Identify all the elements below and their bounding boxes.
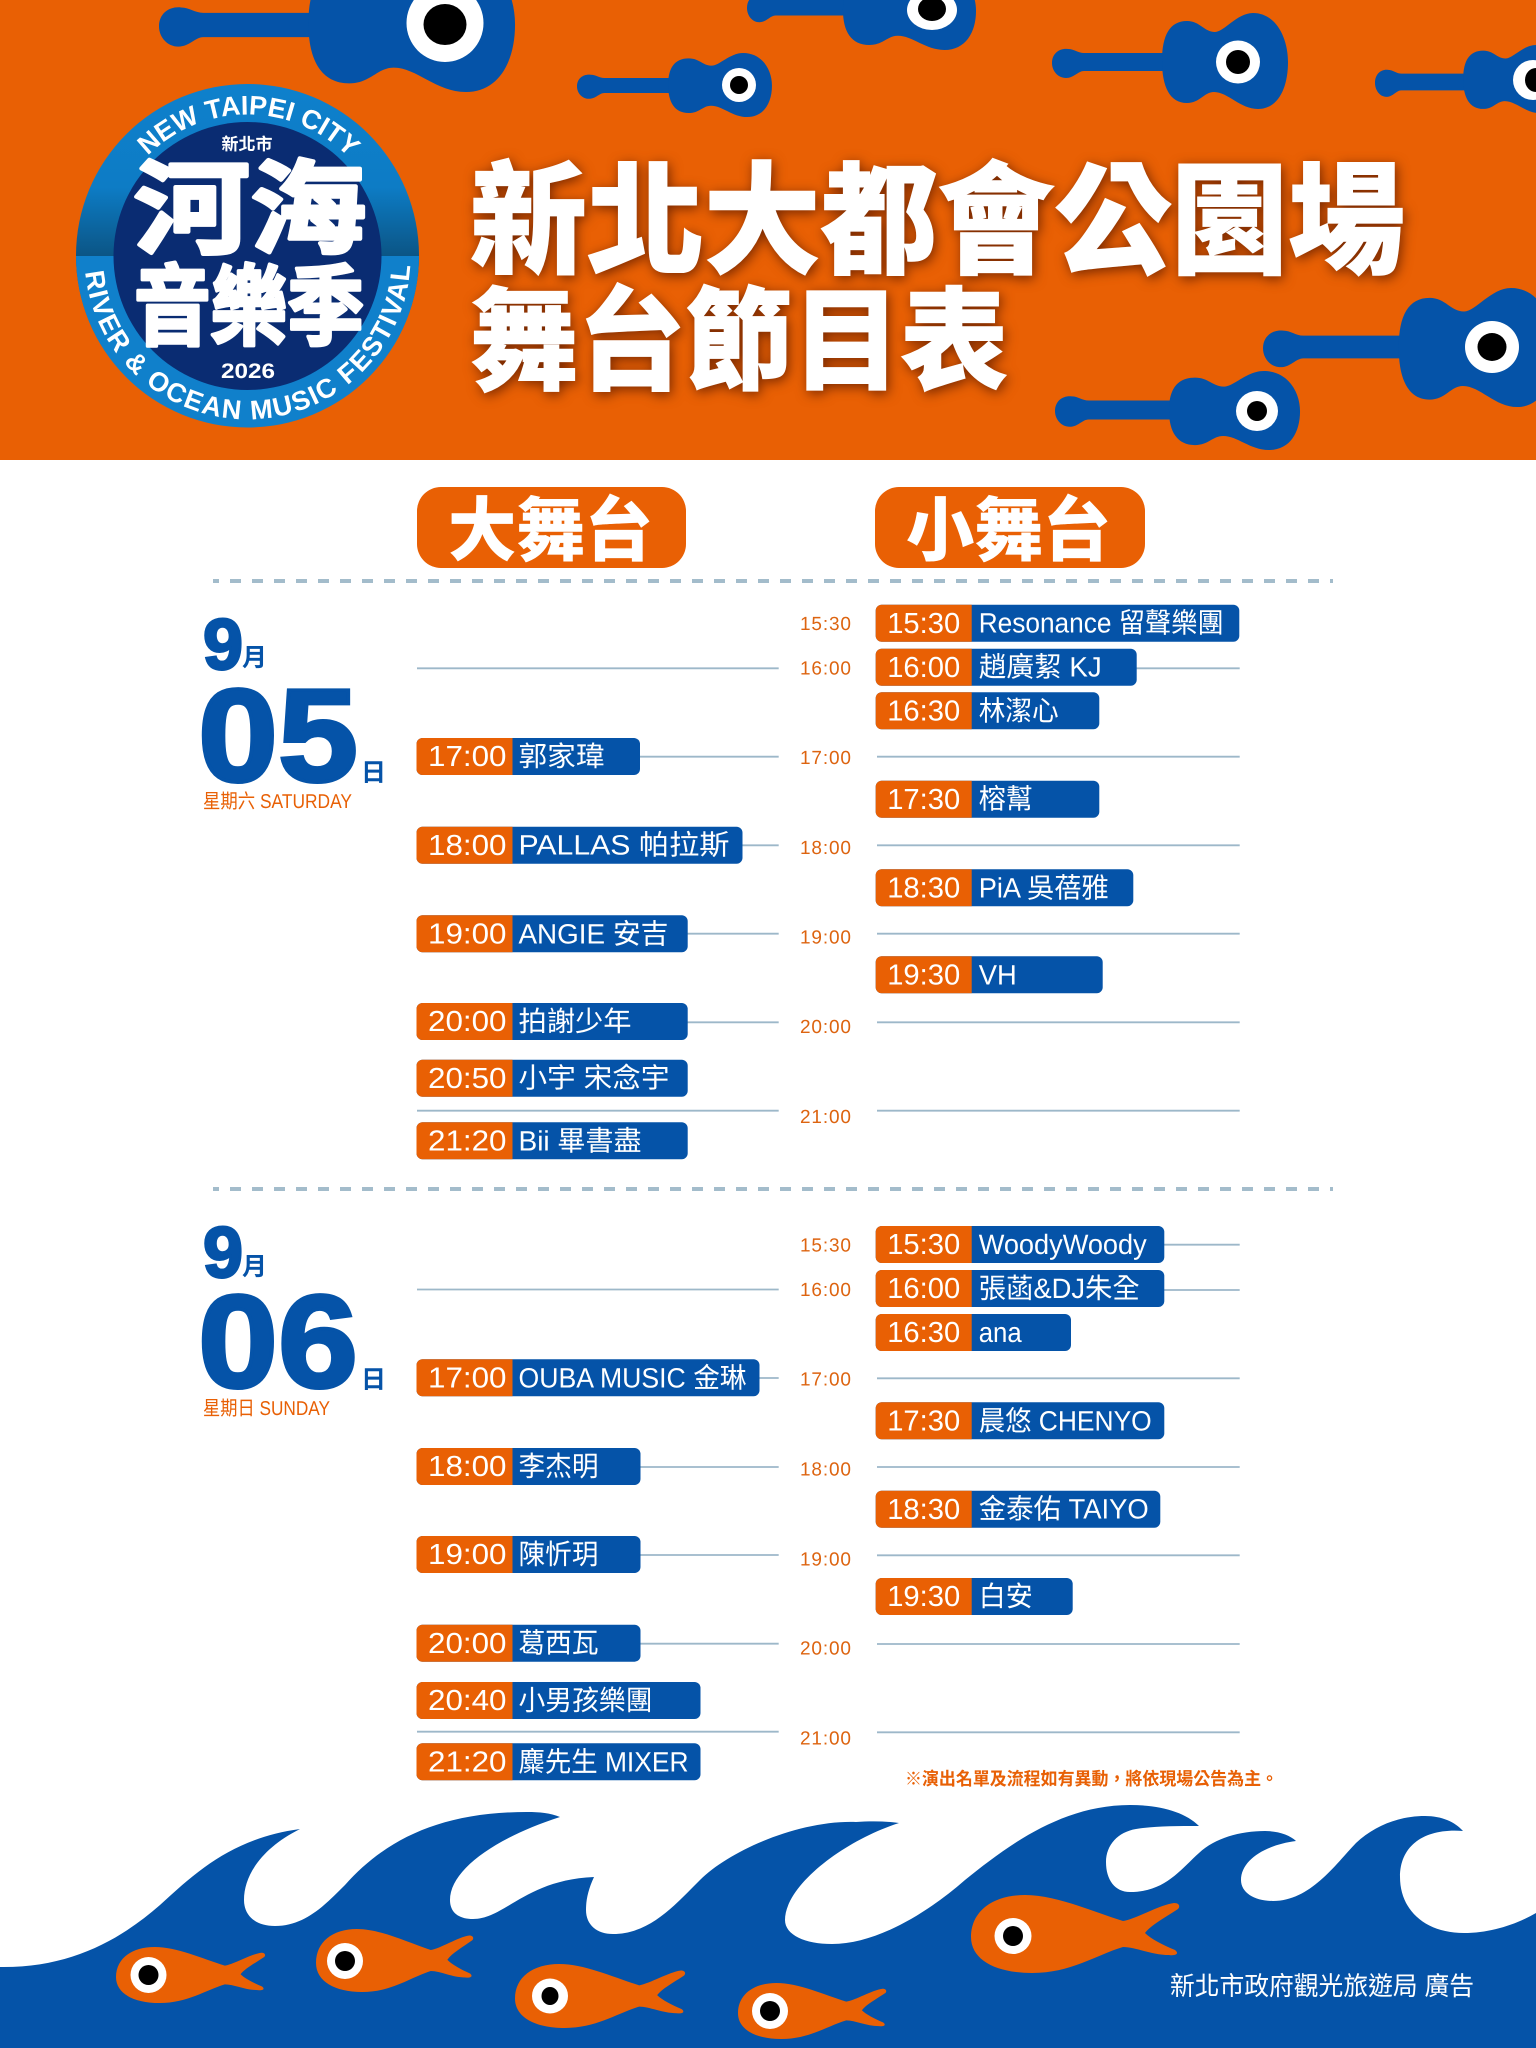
time labels day 2: 21:00: [800, 1728, 851, 1750]
time labels day 1: 18:00: [800, 838, 851, 859]
icon: fish 1: [116, 1947, 265, 2003]
time labels day 1: 20:00: [800, 1017, 851, 1038]
act: 16:00 張菡&DJ朱全: [876, 1270, 1164, 1307]
act: 20:40 小男孩樂團: [416, 1682, 700, 1719]
act: 20:00 拍謝少年: [416, 1003, 688, 1040]
main stage day 2 schedule: [416, 1359, 760, 1780]
date block: September 6: 9: [203, 1213, 243, 1293]
notice text: ※演出名單及流程如有異動，將依現場公告為主。: [905, 1769, 1278, 1789]
icon: guitar 6: [1263, 288, 1536, 407]
date block: September 5: [198, 605, 386, 813]
act: 17:00 郭家瑋: 17:00: [428, 741, 506, 773]
time labels day 1: 15:30: [800, 614, 851, 635]
time labels day 2: 15:30: [800, 1236, 851, 1256]
time labels day 2: 20:00: [800, 1639, 851, 1660]
act: 16:00 趙廣絜 KJ: 趙廣絜 KJ: [979, 652, 1102, 683]
act: 17:00 OUBA MUSIC 金琳: [416, 1359, 760, 1396]
act: 17:00 OUBA MUSIC 金琳: 17:00: [428, 1363, 506, 1395]
act: 19:30 VH: VH: [979, 959, 1017, 990]
act: 19:30 VH: 19:30: [887, 959, 960, 991]
icon: guitar 5: [1375, 45, 1536, 113]
act: 21:20 Bii 畢書盡: [416, 1122, 688, 1159]
act: 16:30 林潔心: 16:30: [887, 695, 960, 727]
icon: fish 3: [515, 1964, 685, 2028]
logo arc text top: NEW TAIPEI CITY: [136, 96, 362, 154]
act: 18:00 PALLAS: 18:00: [428, 830, 506, 862]
act: 20:50 小宇 宋念宇: 小宇 宋念宇: [518, 1063, 670, 1094]
logo big text 河海: 河海: [134, 128, 366, 275]
small stage day 2 schedule: [876, 1226, 1164, 1615]
act: 19:30 白安: 白安: [979, 1581, 1033, 1612]
act: 21:20 Bii 畢書盡: Bii 畢書盡: [518, 1125, 642, 1156]
act: 21:20 麋先生 MIXER: 21:20: [428, 1747, 506, 1779]
title: 舞台節目表: [470, 252, 1008, 414]
ocean waves: [0, 1805, 1536, 2048]
act: 20:40 小男孩樂團: 20:40: [428, 1685, 506, 1717]
date block: September 6: 星期日 SUNDAY: [203, 1398, 330, 1420]
act: 15:30 WoodyWoody: [876, 1226, 1164, 1263]
act: 18:00 李杰明: 18:00: [428, 1451, 506, 1483]
time labels day 1: 17:00: [800, 748, 851, 769]
date block: September 5: 05: [198, 662, 358, 809]
act: 15:30 WoodyWoody: WoodyWoody: [979, 1229, 1147, 1260]
icon: fish 2: [316, 1929, 473, 1992]
act: 19:00 ANGIE: 19:00: [428, 918, 506, 950]
act: 20:50 小宇 宋念宇: [416, 1060, 688, 1097]
act: 16:00 趙廣絜 KJ: [876, 649, 1137, 686]
act: 19:30 白安: 19:30: [887, 1581, 960, 1613]
icon: guitar 1: [159, 0, 515, 92]
act: 20:00 拍謝少年: 拍謝少年: [518, 1006, 632, 1037]
act: 21:20 Bii 畢書盡: 21:20: [428, 1126, 506, 1158]
date block: September 6: 日: [361, 1366, 386, 1394]
act: 16:30 林潔心: 林潔心: [979, 695, 1059, 726]
act: 16:30 ana: 16:30: [887, 1317, 960, 1349]
act: 16:00 張菡&DJ朱全: 張菡&DJ朱全: [979, 1273, 1140, 1304]
date block: September 5: 星期六 SATURDAY: [203, 791, 352, 813]
act: 16:00 趙廣絜 KJ: 16:00: [887, 652, 960, 684]
festival logo badge: [76, 84, 419, 428]
act: 16:00 張菡&DJ朱全: 16:00: [887, 1273, 960, 1305]
act: 17:30 晨悠 CHENYO: 17:30: [887, 1406, 960, 1438]
logo year: 2026: [221, 360, 275, 383]
time labels day 2: 19:00: [800, 1550, 851, 1570]
act: 19:00 陳忻玥: 19:00: [428, 1539, 506, 1571]
act: 15:30 Resonance 留聲樂團: [876, 605, 1239, 642]
act: 21:20 麋先生 MIXER: 麋先生 MIXER: [518, 1746, 688, 1777]
act: 17:00 OUBA MUSIC 金琳: OUBA MUSIC 金琳: [518, 1362, 746, 1393]
act: 18:00 PALLAS: [416, 827, 742, 864]
act: 19:30 VH: [876, 956, 1103, 993]
title: [470, 123, 1405, 414]
act: 18:30 金泰佑 TAIYO: 18:30: [887, 1494, 960, 1526]
act: 17:30 榕幫: [876, 781, 1099, 818]
act: 15:30 WoodyWoody: 15:30: [887, 1229, 960, 1261]
time labels day 1: 19:00: [800, 928, 851, 948]
logo big text 音樂季: 音樂季: [134, 237, 364, 364]
act: 17:00 郭家瑋: [416, 738, 640, 775]
icon: fish 4: [738, 1983, 886, 2039]
title: 新北大都會公園場: [470, 123, 1405, 300]
act: 20:00 葛西瓦: 20:00: [428, 1628, 506, 1660]
act: 16:30 ana: [876, 1314, 1071, 1351]
date block: September 5: 9: [203, 605, 243, 685]
time labels day 2: 18:00: [800, 1460, 851, 1481]
time labels day 1: 21:00: [800, 1107, 851, 1128]
act: 20:40 小男孩樂團: 小男孩樂團: [518, 1685, 652, 1716]
time labels day 1: 16:00: [800, 658, 851, 680]
time labels day 2: 16:00: [800, 1280, 851, 1301]
icon: guitar 3: [747, 0, 976, 50]
act: 17:30 晨悠 CHENYO: 晨悠 CHENYO: [979, 1405, 1152, 1436]
act: 18:30 PiA 吳蓓雅: [876, 869, 1133, 906]
act: 20:00 拍謝少年: 20:00: [428, 1006, 506, 1038]
icon: fish 5: [971, 1895, 1179, 1973]
header banner: [0, 0, 1536, 460]
hour grid lines day 1: [417, 668, 1240, 1111]
act: 19:00 ANGIE: ANGIE 安吉: [518, 918, 668, 949]
time labels day 2: [800, 1236, 851, 1750]
icon: guitar 4: [1052, 13, 1288, 109]
act: 20:00 葛西瓦: [416, 1625, 640, 1662]
logo small text 新北市: 新北市: [222, 135, 272, 154]
date block: September 6: 月: [242, 1253, 267, 1281]
act: 17:00 郭家瑋: 郭家瑋: [518, 741, 604, 772]
act: 19:00 ANGIE: [416, 915, 688, 952]
date block: September 5: 日: [361, 759, 386, 787]
act: 21:20 麋先生 MIXER: [416, 1743, 700, 1780]
act: 20:50 小宇 宋念宇: 20:50: [428, 1063, 506, 1095]
small stage day 1 schedule: [876, 605, 1239, 993]
act: 17:30 晨悠 CHENYO: [876, 1402, 1164, 1439]
date block: September 6: 06: [198, 1268, 358, 1415]
stage heading: small stage: 小舞台: [906, 475, 1111, 576]
act: 19:30 白安: [876, 1578, 1073, 1615]
act: 18:30 金泰佑 TAIYO: [876, 1491, 1160, 1528]
act: 16:30 ana: ana: [979, 1317, 1022, 1348]
time labels day 1: [800, 614, 851, 1128]
act: 18:30 金泰佑 TAIYO: 金泰佑 TAIYO: [979, 1494, 1149, 1525]
icon: guitar 7: [1055, 371, 1300, 450]
act: 18:00 李杰明: 李杰明: [518, 1451, 598, 1482]
date block: September 5: 月: [242, 644, 267, 672]
date block: September 6: [198, 1213, 386, 1420]
act: 17:30 榕幫: 榕幫: [979, 784, 1033, 815]
act: 18:30 PiA 吳蓓雅: 18:30: [887, 872, 960, 904]
time labels day 2: 17:00: [800, 1370, 851, 1391]
stage heading: main stage: 大舞台: [448, 475, 653, 576]
footer sponsor text: 新北市政府觀光旅遊局 廣告: [1170, 1971, 1474, 2001]
act: 18:00 李杰明: [416, 1448, 640, 1485]
act: 18:00 PALLAS: PALLAS 帕拉斯: [518, 830, 730, 861]
logo arc text bottom: RIVER & OCEAN MUSIC FESTIVAL: [85, 266, 410, 420]
icon: guitar 2: [577, 53, 772, 117]
act: 17:30 榕幫: 17:30: [887, 784, 960, 816]
act: 15:30 Resonance 留聲樂團: Resonance 留聲樂團: [979, 608, 1224, 639]
hour grid lines day 2: [417, 1245, 1240, 1732]
act: 19:00 陳忻玥: [416, 1536, 640, 1573]
act: 19:00 陳忻玥: 陳忻玥: [518, 1539, 598, 1570]
main stage day 1 schedule: [416, 738, 742, 1159]
act: 20:00 葛西瓦: 葛西瓦: [518, 1628, 598, 1659]
act: 15:30 Resonance 留聲樂團: 15:30: [887, 608, 960, 640]
act: 16:30 林潔心: [876, 692, 1099, 729]
act: 18:30 PiA 吳蓓雅: PiA 吳蓓雅: [979, 872, 1109, 903]
